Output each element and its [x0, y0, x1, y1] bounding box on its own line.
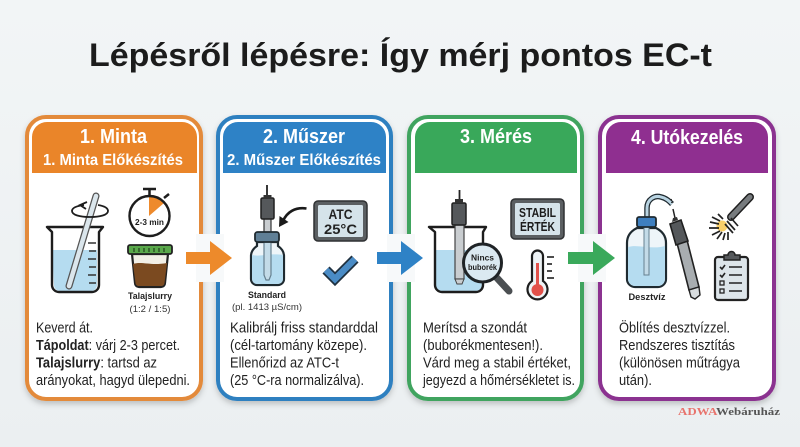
- icon: standard solution bottle with probe: (pl. 1413 µS/cm): [232, 302, 302, 313]
- icon: clipboard checklist: [715, 252, 748, 300]
- text: step 4 instructions: [619, 318, 741, 389]
- arrow: step 2 to 3: [377, 234, 423, 282]
- icon: soil slurry cup: [128, 245, 172, 315]
- icon: curved arrow to probe: [279, 208, 306, 227]
- icon: ATC display: [314, 201, 367, 241]
- icon: soil slurry cup: (1:2 / 1:5): [130, 304, 170, 315]
- text: step 4 instructions: (különösen műtrágya: [619, 356, 741, 372]
- header: 4. Utókezelés: 4. Utókezelés: [631, 127, 743, 149]
- text: step 2 instructions: Kalibrálj friss standarddal: [230, 320, 378, 336]
- icon: beaker with stirring rod: [47, 196, 108, 292]
- text: step 3 instructions: Merítsd a szondát: [423, 320, 527, 336]
- header: 2. Műszer: [223, 122, 386, 173]
- icon: stable value display: [511, 199, 564, 239]
- icon: rinsed probe: [670, 199, 700, 299]
- icon: beaker with probe: [429, 190, 486, 292]
- header: 2. Műszer: 2. Műszer Előkészítés: [227, 152, 381, 169]
- panel: 4. Utókezelés: [600, 117, 774, 399]
- icon: stopwatch 2-3 min: [130, 189, 170, 236]
- icon: ATC display: 25°C: [324, 222, 357, 237]
- header: 2. Műszer: 2. Műszer: [263, 126, 345, 148]
- icon: ATC display: ATC: [328, 207, 353, 222]
- text: step 2 instructions: (cél-tartomány közepe).: [230, 338, 367, 354]
- title: Lépésről lépésre: Így mérj pontos EC-t: [89, 37, 712, 73]
- text: step 3 instructions: jegyezd a hőmérsékletet is.: [422, 373, 575, 389]
- icon: distilled water wash bottle: Desztvíz: [628, 292, 666, 302]
- panel: 1. Minta: [27, 117, 201, 399]
- icon: check mark: [326, 259, 355, 279]
- icon: soil slurry cup: Talajslurry: [128, 291, 172, 301]
- text: step 4 instructions: után).: [619, 373, 652, 389]
- icon: stopwatch 2-3 min: 2-3 min: [135, 218, 164, 227]
- text: step 3 instructions: (buborékmentesen!).: [423, 338, 543, 354]
- arrow: step 1 to 2: [186, 234, 232, 282]
- watermark: ADWA Webáruház: [678, 406, 780, 418]
- text: step 1 instructions: arányokat, hagyd ülepedni.: [36, 373, 190, 389]
- icon: magnifier, no bubbles: [464, 244, 509, 291]
- header: 1. Minta: 1. Minta Előkészítés: [43, 152, 183, 169]
- text: step 1 instructions: Tápoldat: várj 2-3 percet.: [36, 338, 180, 354]
- header: 1. Minta: [32, 122, 197, 173]
- icon: distilled water wash bottle: [627, 196, 672, 302]
- header: 4. Utókezelés: [606, 122, 768, 173]
- icon: cleaning brush: [709, 197, 750, 240]
- text: step 1 instructions: Keverd át.: [36, 320, 93, 336]
- icon: magnifier, no bubbles: Nincs: [471, 252, 494, 262]
- header: 3. Mérés: [415, 122, 577, 173]
- icon: stable value display: STABIL: [519, 206, 556, 220]
- icon: magnifier, no bubbles: buborék: [468, 262, 497, 272]
- text: step 1 instructions: [36, 320, 190, 389]
- icon: thermometer: [528, 250, 554, 299]
- panel: 2. Műszer: [218, 117, 391, 399]
- icon: stable value display: ÉRTÉK: [520, 219, 555, 234]
- text: step 4 instructions: Öblítés desztvízzel.: [619, 318, 730, 336]
- text: step 2 instructions: Ellenőrizd az ATC-t: [230, 356, 339, 372]
- icon: standard solution bottle with probe: Standard: [248, 290, 286, 300]
- text: step 4 instructions: Rendszeres tisztítás: [619, 338, 735, 354]
- text: step 2 instructions: [230, 320, 378, 389]
- icon: standard solution bottle with probe: [232, 185, 302, 313]
- text: step 3 instructions: Várd meg a stabil értéket,: [423, 356, 571, 372]
- arrow: step 3 to 4: [568, 234, 615, 282]
- text: step 2 instructions: (25 °C-ra normalizálva).: [230, 373, 364, 389]
- text: step 1 instructions: Talajslurry: tartsd az: [36, 356, 157, 372]
- text: step 3 instructions: [422, 320, 575, 389]
- header: 1. Minta: 1. Minta: [80, 126, 148, 148]
- panel: 3. Mérés: [409, 117, 582, 399]
- header: 3. Mérés: 3. Mérés: [460, 126, 532, 148]
